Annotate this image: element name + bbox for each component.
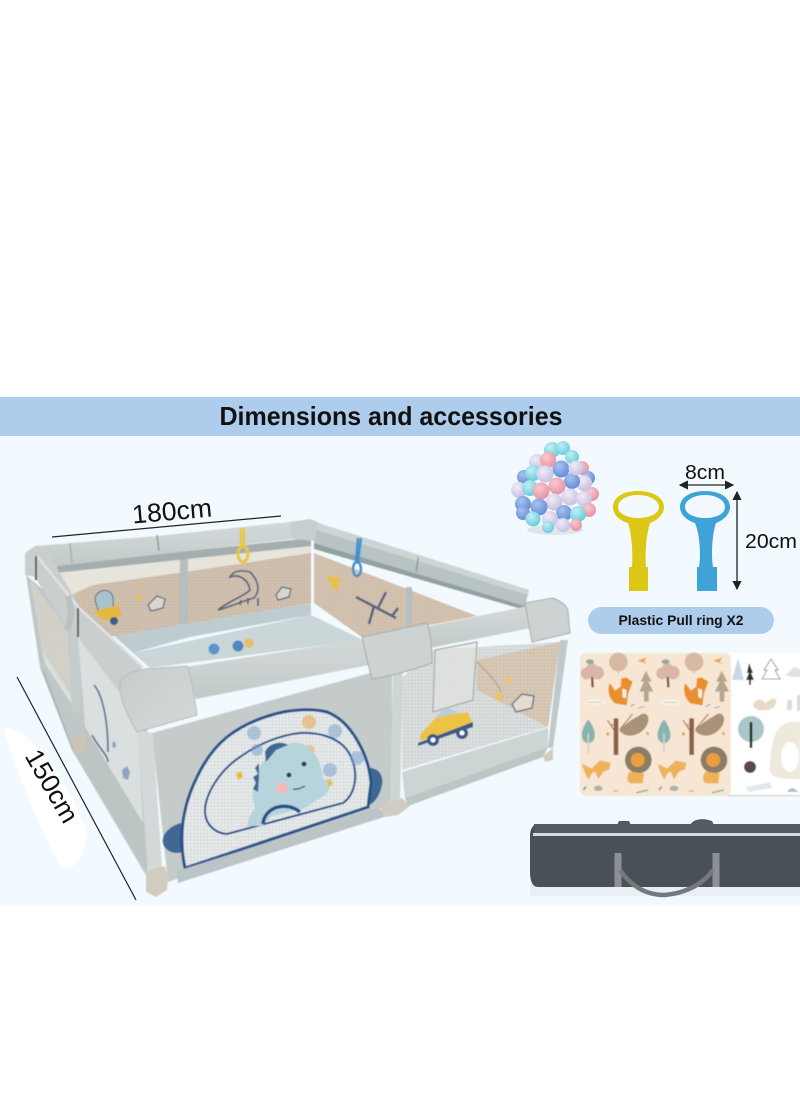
dimension: 180cm <box>52 493 281 537</box>
carry bag <box>530 819 800 896</box>
front solid panel <box>152 667 392 882</box>
doodle: side dinosaur <box>92 685 108 762</box>
dimension: 150cm: 150cm <box>19 744 85 828</box>
doodle: yellow plane <box>326 575 340 590</box>
back mesh wall <box>40 540 311 650</box>
yellow pull ring <box>613 491 664 591</box>
header band <box>0 397 800 436</box>
bag handle <box>618 853 716 887</box>
doodle: airplane <box>356 592 398 624</box>
dinosaur character <box>236 743 333 826</box>
pull ring label pill <box>588 607 774 634</box>
window flap <box>433 642 477 712</box>
dimension: 8cm <box>680 462 733 485</box>
mat: animal prints <box>581 653 729 793</box>
back rails <box>35 519 529 610</box>
blue pull ring <box>680 491 730 591</box>
dimension: 150cm <box>17 677 136 900</box>
doodle: yellow car <box>418 709 473 746</box>
posts, bottom rails and feet <box>72 640 568 897</box>
colored dots in window <box>247 724 364 777</box>
title: Dimensions and accessories <box>220 401 562 431</box>
front top rail <box>120 598 570 732</box>
left side wall <box>25 546 153 877</box>
playpen illustration <box>25 519 570 897</box>
ear bumps <box>163 768 382 853</box>
doodle: back dinosaur <box>218 571 258 610</box>
right back mesh wall <box>314 553 477 638</box>
yellow hanging ring <box>238 528 248 562</box>
dimension: 180cm: 180cm <box>131 493 213 529</box>
dimension: 20cm <box>737 492 797 589</box>
blue hanging ring <box>353 538 361 576</box>
dimension: 8cm: 8cm <box>685 462 725 484</box>
mat: peach side <box>580 653 731 796</box>
middle fabric flap <box>362 623 432 679</box>
doodle: small dino car <box>94 590 122 625</box>
right mesh panel <box>402 642 560 806</box>
dimension: 20cm: 20cm <box>745 531 797 553</box>
play mat <box>580 653 800 797</box>
ball bundle <box>511 441 599 535</box>
doodle: skate <box>512 694 534 712</box>
mat: white side <box>727 653 800 797</box>
pull ring label pill: Plastic Pull ring X2 <box>618 612 744 628</box>
doodle: back skates <box>148 587 291 611</box>
floor <box>113 603 363 668</box>
white blob behind 150cm label <box>3 727 87 868</box>
left rail <box>25 546 143 690</box>
right corner fabric flap <box>525 598 570 642</box>
small balls on floor <box>208 638 254 654</box>
page background panel <box>0 436 800 905</box>
dinosaur arch window <box>163 710 382 868</box>
